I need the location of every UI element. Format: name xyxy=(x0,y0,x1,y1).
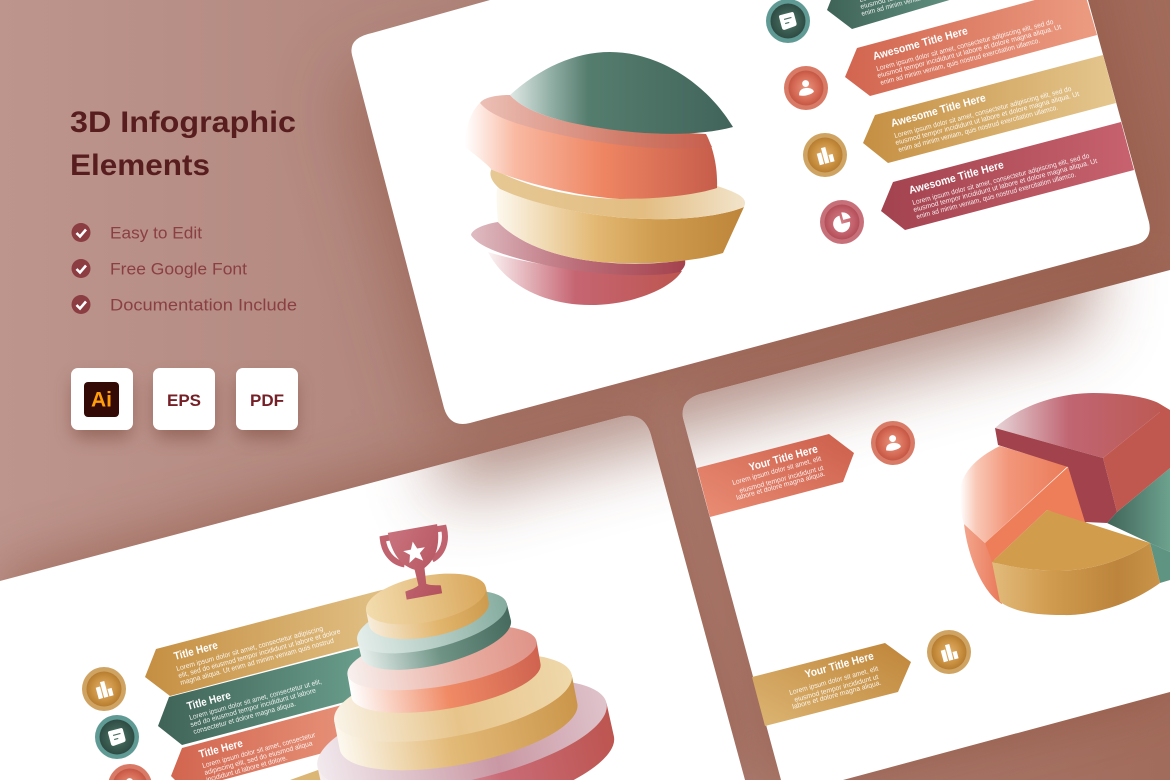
pie: red top xyxy=(995,393,1160,458)
panel: intro text column xyxy=(70,106,298,438)
ribbon: gold your title here: Lorem ipsum dolor sit amet, elit xyxy=(789,666,879,697)
ribbon: orange your title here: eiusmod tempor incididunt ut xyxy=(739,465,824,495)
feature list xyxy=(72,223,297,314)
3D pie chart xyxy=(960,393,1170,615)
sphere: gold body xyxy=(497,188,744,263)
pie: gold side xyxy=(992,543,1160,615)
ribbon: green title here xyxy=(158,640,390,745)
sphere: orange body xyxy=(465,103,717,199)
feature: easy to edit: Easy to Edit xyxy=(110,224,202,242)
title xyxy=(70,106,296,182)
ribbon: orange title here: Title Here xyxy=(198,738,244,761)
ribbon: red awesome title xyxy=(881,122,1134,230)
tier 2 green xyxy=(351,578,517,682)
ribbon: orange title here xyxy=(171,692,390,780)
pie: gold top xyxy=(992,510,1150,571)
ribbon: green xyxy=(827,0,1045,29)
icon: teal chat badge xyxy=(95,715,139,759)
ribbon: gold awesome title: Awesome Title Here xyxy=(890,92,987,130)
ribbon: gold awesome title: Lorem ipsum dolor sit amet, consectetur adipiscing elit, sed do xyxy=(894,86,1072,140)
ribbon: orange title here: Lorem ipsum dolor sit amet, consectetur xyxy=(202,732,317,770)
sphere: gold top xyxy=(490,168,745,219)
pie: orange top xyxy=(960,446,1068,543)
title: Elements xyxy=(70,149,210,182)
ribbon: red awesome title: enim ad minim veniam, quis nostrud exercitation ullamco. xyxy=(916,171,1077,221)
icon: PDF tile: PDF xyxy=(250,391,284,410)
title: 3D Infographic xyxy=(70,106,296,139)
ribbon: gold awesome title: enim ad minim veniam, quis nostrud exercitation ullamco. xyxy=(898,104,1059,154)
ribbon: gold title here: Lorem ipsum dolor sit amet, consectetur adipiscing xyxy=(176,626,324,673)
pie: red side xyxy=(1103,404,1170,512)
icon: gold bars badge xyxy=(803,133,847,177)
panel: bottom-right slide xyxy=(682,270,1170,780)
ribbon: gold your title here xyxy=(752,643,911,726)
pie: dark red face xyxy=(995,428,1117,523)
icon: Ai tile xyxy=(71,368,133,430)
icon: EPS tile xyxy=(153,368,215,430)
ribbon: orange awesome title xyxy=(845,0,1097,96)
ribbon: red awesome title: eiusmod tempor incididunt ut labore et dolore magna aliqua. Ut xyxy=(913,158,1098,214)
ribbon: lowest gold xyxy=(262,755,360,780)
sphere: red body xyxy=(488,252,682,305)
ribbon: gold your title here: Your Title Here xyxy=(804,650,875,681)
icon: teal chat badge xyxy=(766,0,810,43)
tier 4 gold xyxy=(327,638,585,780)
icon: check 2 xyxy=(72,259,90,278)
ribbon: gold awesome title: eiusmod tempor incididunt ut labore et dolore magna aliqua. Ut xyxy=(895,91,1080,147)
ribbon: orange awesome title: enim ad minim veniam, quis nostrud exercitation ullamco. xyxy=(880,37,1041,87)
icon: Ai tile: Ai xyxy=(91,388,112,412)
ribbon: red awesome title: Lorem ipsum dolor sit amet, consectetur adipiscing elit, sed do xyxy=(912,153,1090,207)
icon: check 1 xyxy=(72,223,90,242)
ribbon: gold your title here: labore et dolore magna aliqua. xyxy=(792,680,882,711)
feature: documentation include: Documentation Include xyxy=(110,296,297,314)
pie: orange inner face xyxy=(985,467,1087,562)
icon: orange person badge xyxy=(784,66,828,110)
ribbon: orange awesome title: eiusmod tempor incididunt ut labore et dolore magna aliqua. Ut xyxy=(877,24,1062,80)
ribbon: gold your title here: eiusmod tempor incididunt ut xyxy=(794,674,879,704)
ribbon: green title here: Lorem ipsum dolor sit amet, consectetur ut elit, xyxy=(189,679,323,722)
sphere: green dome xyxy=(510,52,733,134)
feature: free google font: Free Google Font xyxy=(110,260,247,278)
layered sphere xyxy=(465,52,745,305)
tier 1 gold xyxy=(362,565,493,648)
icon: trophy xyxy=(382,523,455,602)
icon: check 3 xyxy=(72,295,90,314)
icon: EPS tile: EPS xyxy=(167,391,201,410)
ribbon: green title here: consectetur et dolore magna aliqua. xyxy=(193,701,297,736)
ribbon: orange title here: adipiscing elit, sed do eiusmod aliqua xyxy=(204,740,314,777)
pie: green side xyxy=(1150,543,1170,583)
tier 5 red xyxy=(308,658,624,780)
ribbon: orange awesome title: Lorem ipsum dolor sit amet, consectetur adipiscing elit, sed do xyxy=(876,19,1054,73)
ribbon: gold title here xyxy=(145,580,420,696)
stacked pyramid xyxy=(308,565,624,780)
ribbon: orange awesome title: Awesome Title Here xyxy=(872,25,969,63)
icon: orange person badge xyxy=(871,421,915,465)
panel: top-right slide xyxy=(351,0,1150,424)
ribbon: red awesome title: Awesome Title Here xyxy=(908,159,1005,197)
pie: green slice xyxy=(1107,468,1170,552)
icon: red pie badge xyxy=(820,200,864,244)
ribbon: green title here: Title Here xyxy=(186,690,232,713)
format tiles xyxy=(71,368,298,438)
icon: orange person badge xyxy=(108,764,152,780)
icon: PDF tile xyxy=(236,368,298,430)
ribbon: orange your title here xyxy=(697,434,854,517)
panel: bottom-left slide xyxy=(0,416,745,780)
ribbon: gold title here: magna aliqua. Ut enim ad minim veniam quis nostrud xyxy=(180,638,335,687)
sphere: orange top xyxy=(480,95,712,149)
icon: gold bars badge xyxy=(82,667,126,711)
ribbon: gold title here: elit, sed do eiusmod tempor incididunt ut labore et dolore xyxy=(178,628,342,680)
tier 3 orange xyxy=(343,614,545,725)
ribbon: orange your title here: Lorem ipsum dolor sit amet, elit xyxy=(732,456,822,487)
ribbon: orange your title here: Your Title Here xyxy=(748,443,819,474)
ribbon: orange your title here: labore et dolore magna aliqua. xyxy=(736,471,826,502)
pie: orange side xyxy=(964,524,1002,604)
icon: gold bars badge xyxy=(927,630,971,674)
ribbon: gold title here: Title Here xyxy=(173,640,219,663)
sphere: red top xyxy=(471,222,685,275)
ribbon: gold awesome title xyxy=(863,55,1116,163)
ribbon: green title here: sed do eiusmod tempor incididunt ut labore xyxy=(190,687,317,729)
